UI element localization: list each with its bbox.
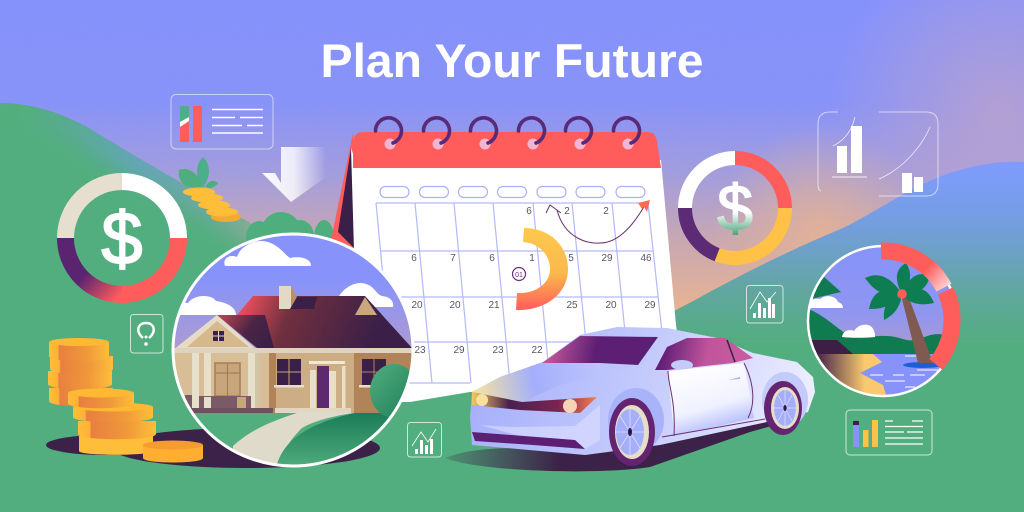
calendar header xyxy=(353,132,661,168)
calendar rings xyxy=(375,118,639,150)
right stack xyxy=(68,388,156,455)
calendar dates: 46 xyxy=(640,253,652,264)
calendar back cover xyxy=(329,133,366,258)
calendar dates: 5 xyxy=(568,253,574,264)
palm trunk xyxy=(901,295,933,363)
icon: plant growing from coins xyxy=(179,157,241,222)
card: bar chart and text lines, top left xyxy=(171,94,273,149)
calendar dates: 20 xyxy=(605,300,617,311)
dark rock xyxy=(812,340,853,354)
small circled number: 01 xyxy=(515,272,523,279)
house windows xyxy=(274,359,389,388)
beach clouds xyxy=(810,296,843,308)
beach illustration in circle xyxy=(806,246,960,398)
calendar dates: 23 xyxy=(492,345,504,356)
car body xyxy=(470,327,815,455)
rear wheel xyxy=(762,372,808,435)
porch railing xyxy=(185,395,273,413)
car hood xyxy=(472,362,632,402)
card: bar chart and text lines, bottom right xyxy=(846,410,932,455)
calendar grid xyxy=(376,203,663,383)
icon card: light bulb xyxy=(130,314,163,353)
green hill: right xyxy=(600,162,1024,512)
roof gable tan xyxy=(355,297,377,315)
ground shadow under house and coins xyxy=(46,428,380,468)
mini chart icon near house xyxy=(408,422,442,457)
background mountain xyxy=(812,277,841,298)
small circled number xyxy=(512,268,526,280)
arrow pointing down xyxy=(262,147,326,202)
green hill: left xyxy=(0,103,252,345)
calendar page xyxy=(352,160,684,402)
calendar dates: 2 xyxy=(564,206,570,217)
left stack xyxy=(48,338,113,406)
calendar dates: 29 xyxy=(453,345,465,356)
calendar dates: 1 xyxy=(529,253,535,264)
house illustration in circle xyxy=(173,234,418,470)
car xyxy=(445,327,815,471)
coin stacks xyxy=(48,338,203,462)
front step xyxy=(275,408,351,413)
calendar dates: 29 xyxy=(644,300,656,311)
left donut with dollar sign xyxy=(66,182,178,294)
porch gable xyxy=(176,315,254,348)
sand beach xyxy=(818,354,886,395)
garden path xyxy=(233,412,354,464)
title: Plan Your Future xyxy=(320,34,704,87)
car side windows xyxy=(655,338,753,370)
flat coin xyxy=(143,440,203,462)
green foreground ground xyxy=(0,345,1024,512)
right donut with dollar sign: $ xyxy=(717,172,753,244)
calendar dates xyxy=(411,206,656,356)
calendar dates: 21 xyxy=(488,300,500,311)
red progress arc xyxy=(881,251,952,364)
sea xyxy=(860,354,940,395)
calendar dates: 2 xyxy=(603,206,609,217)
car door panel xyxy=(662,363,765,437)
front wheel xyxy=(608,388,664,466)
right donut with dollar sign xyxy=(685,158,785,258)
green hills xyxy=(809,310,942,354)
calendar dates: 23 xyxy=(414,345,426,356)
chimney xyxy=(279,286,317,309)
calendar dates: 6 xyxy=(489,253,495,264)
car windshield xyxy=(542,336,658,365)
calendar dates: 6 xyxy=(411,253,417,264)
porch door xyxy=(215,363,240,396)
clouds xyxy=(175,241,393,315)
calendar xyxy=(329,118,684,402)
back roof xyxy=(237,296,412,348)
lawn xyxy=(194,413,355,464)
bushes behind house xyxy=(246,212,334,256)
calendar dates: 20 xyxy=(411,300,423,311)
car headlight strip xyxy=(472,392,597,413)
porch columns xyxy=(192,353,259,408)
mini chart icon, right xyxy=(746,286,783,323)
calendar dates: 29 xyxy=(601,253,613,264)
car mirror xyxy=(671,360,693,370)
car front grille xyxy=(472,432,585,449)
right lawn xyxy=(277,413,389,464)
water ripples xyxy=(870,356,940,387)
half donut gauge xyxy=(516,228,568,310)
car shadow xyxy=(445,418,800,471)
car bumper light xyxy=(480,405,600,449)
calendar dates: 6 xyxy=(526,206,532,217)
calendar weekday pills xyxy=(380,186,645,198)
calendar dates: 25 xyxy=(566,300,578,311)
calendar dates: 20 xyxy=(449,300,461,311)
card: growth bar charts, top right xyxy=(818,112,938,196)
eave strip xyxy=(173,348,413,353)
garden bush xyxy=(370,364,410,417)
sky haze xyxy=(174,294,412,348)
palm fronds xyxy=(865,263,934,320)
calendar dates: 22 xyxy=(531,345,543,356)
curved arrow xyxy=(546,200,650,243)
white cloud on hill xyxy=(842,325,875,338)
left roof xyxy=(217,315,274,348)
main wall xyxy=(173,353,414,415)
palm island xyxy=(903,362,943,368)
left donut with dollar sign: $ xyxy=(101,197,143,280)
front door xyxy=(309,361,346,409)
calendar dates: 7 xyxy=(450,253,456,264)
